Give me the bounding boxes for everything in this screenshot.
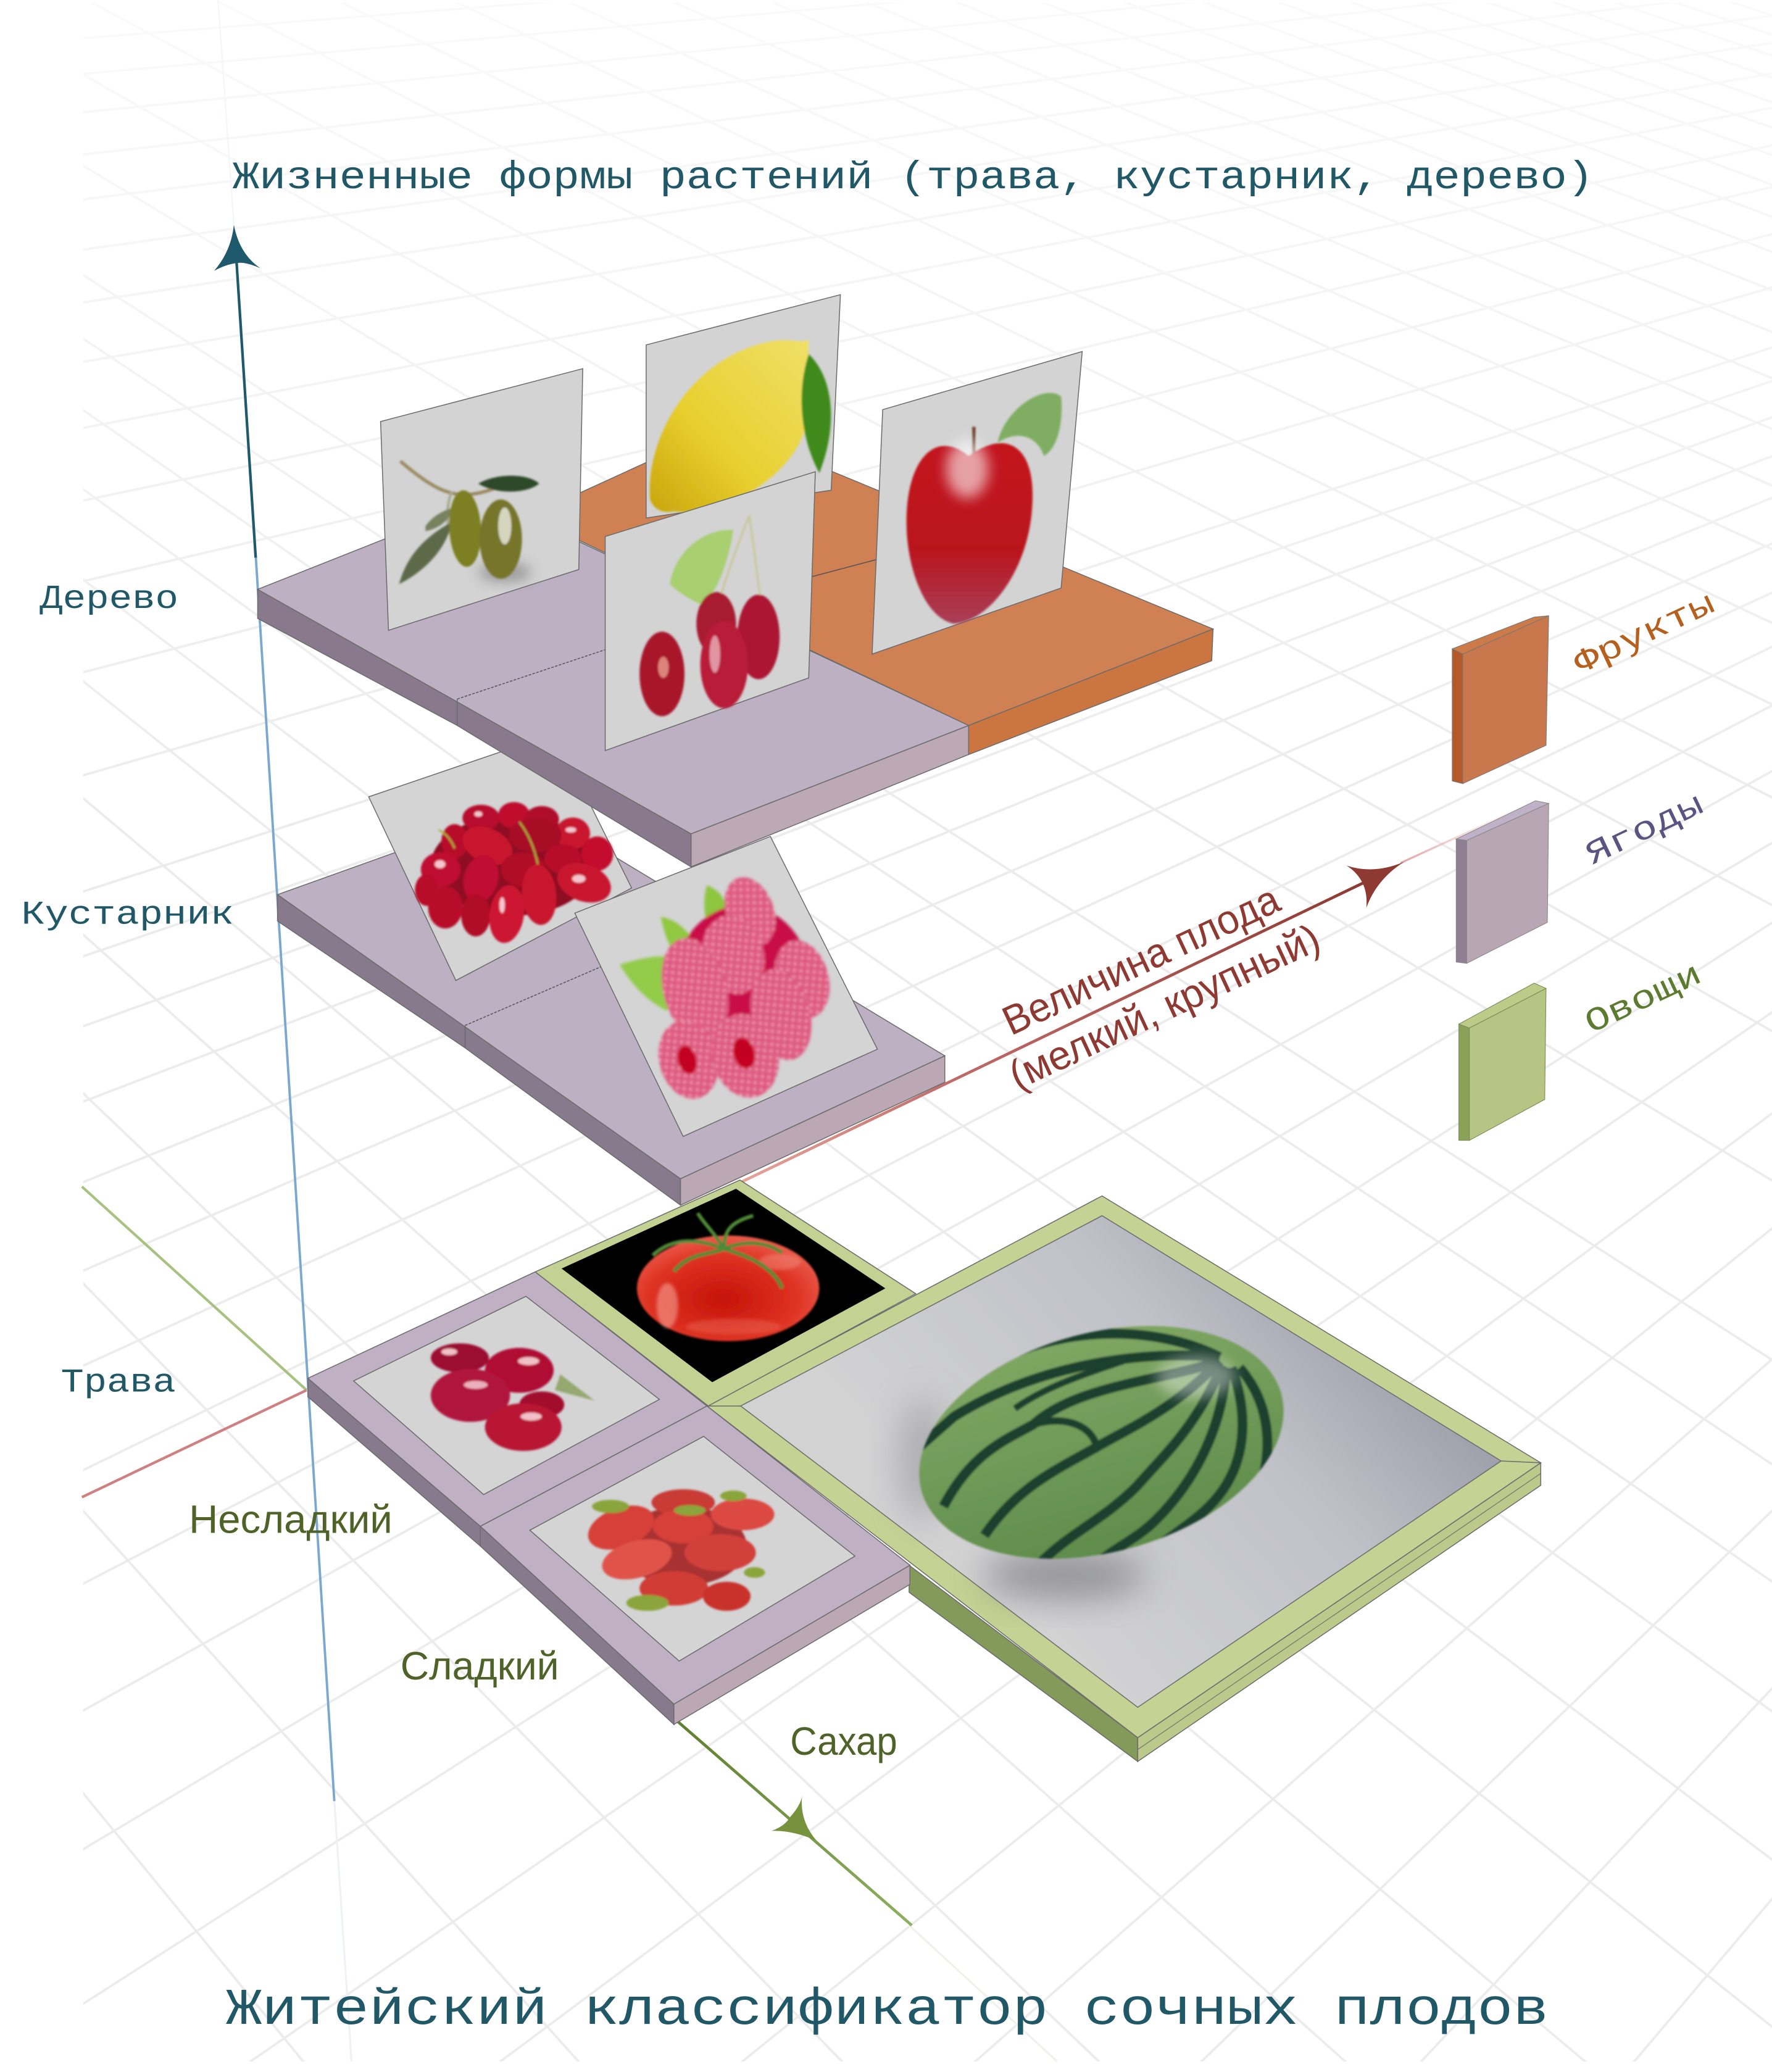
tier: tree [257, 294, 1213, 867]
purple berry slab [257, 465, 968, 867]
label: fruit size axis line 2: (мелкий, крупный) [1002, 915, 1327, 1099]
heading: vertical axis title: Жизненные формы растений (трава, кустарник, дерево) [233, 156, 1594, 200]
legend swatch: berries [1456, 801, 1549, 963]
card: lemon [646, 294, 841, 518]
tier: shrub [278, 733, 945, 1205]
card: apple [872, 351, 1082, 654]
card: olive [381, 368, 583, 630]
axis: fruit size (red) [82, 799, 1539, 1497]
label: sugar axis: Сахар [790, 1719, 897, 1763]
cranberries [431, 1343, 594, 1451]
tier: grass (ground level) [308, 1180, 1541, 1762]
card: cornelian cherry [368, 733, 631, 981]
label: grass tier: Трава [60, 1364, 176, 1402]
shrub slab [278, 805, 945, 1205]
label: sweet: Сладкий [401, 1644, 559, 1688]
orange fruit slab [568, 427, 1213, 754]
legend [1452, 586, 1721, 1141]
card: cherry [605, 472, 815, 751]
watermelon [918, 1325, 1285, 1560]
legend label: vegetables: Овощи [1579, 956, 1708, 1043]
title: Житейский классификатор сочных плодов [226, 1981, 1549, 2040]
strawberries [582, 1489, 775, 1611]
label: fruit size axis line 1: Величина плода [996, 876, 1287, 1044]
label: not sweet: Несладкий [189, 1497, 393, 1541]
label: tree tier: Дерево [40, 581, 178, 618]
slab: strawberry berry [480, 1406, 910, 1725]
label: shrub tier: Кустарник [21, 897, 234, 934]
card: raspberry [575, 836, 878, 1136]
slab: cranberry berry [308, 1272, 707, 1546]
slab: watermelon vegetable [707, 1196, 1541, 1762]
axis: sugar (green) [82, 1187, 1057, 2062]
slab: tomato vegetable [535, 1180, 916, 1406]
legend swatch: vegetables [1459, 983, 1546, 1141]
legend swatch: fruits [1452, 616, 1549, 784]
vertical axis: plant life forms [214, 0, 351, 2062]
legend label: fruits: Фрукты [1568, 586, 1721, 683]
legend label: berries: Ягоды [1580, 786, 1710, 875]
